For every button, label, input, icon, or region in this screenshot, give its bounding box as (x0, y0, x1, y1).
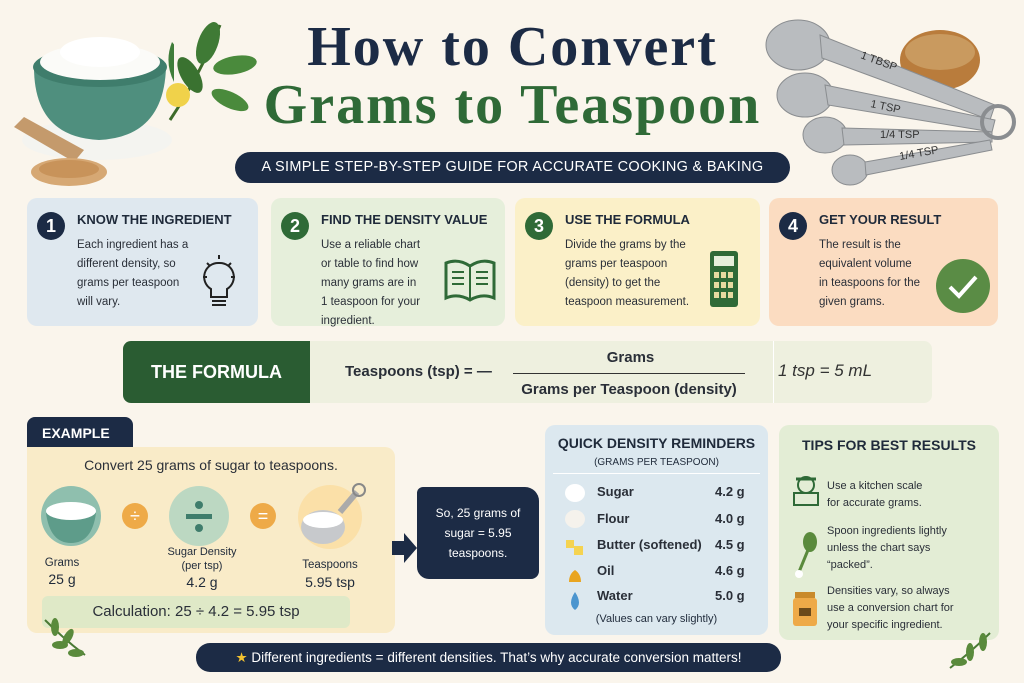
card 3: teaspoon measurement. (565, 296, 689, 308)
card 1: will vary. (77, 296, 120, 308)
title: Grams to Teaspoon (264, 74, 761, 136)
icons: ingredients (565, 484, 585, 610)
example panel: 25 g (48, 571, 76, 587)
card 2: 1 teaspoon for your (321, 296, 420, 308)
example panel: (per tsp) (182, 560, 222, 572)
calculation box (42, 596, 350, 628)
icon: calculator (710, 251, 738, 307)
density panel: Oil (597, 563, 614, 578)
density panel: 4.5 g (715, 537, 745, 552)
tips panel: “packed”. (827, 559, 873, 571)
example panel: Convert 25 grams of sugar to teaspoons. (84, 457, 338, 473)
card 3: USE THE FORMULA (565, 212, 690, 227)
card 4: equivalent volume (819, 258, 912, 270)
density panel (545, 425, 768, 635)
result callout: So, 25 grams of (436, 506, 520, 520)
decorative: flour bowl (14, 37, 174, 186)
tips panel: Spoon ingredients lightly (827, 525, 947, 537)
arrow (392, 533, 417, 563)
result callout: sugar = 5.95 (444, 526, 512, 540)
card 2: ingredient. (321, 315, 375, 327)
card 4: given grams. (819, 296, 885, 308)
formula bar: 1 tsp = 5 mL (778, 361, 872, 380)
card 1 (27, 198, 258, 326)
card 2: Use a reliable chart (321, 239, 420, 251)
card 2: 2 (290, 216, 300, 236)
tips panel: your specific ingredient. (827, 619, 943, 631)
example panel: 5.95 tsp (305, 574, 355, 590)
icon: spoon (795, 532, 817, 578)
formula bar (123, 341, 932, 403)
density panel: 4.2 g (715, 484, 745, 499)
density panel: QUICK DENSITY REMINDERS (558, 435, 755, 451)
bottom banner (196, 643, 781, 672)
density panel: Sugar (597, 484, 634, 499)
title: How to Convert (307, 16, 718, 78)
formula bar: THE FORMULA (151, 362, 282, 382)
density panel: Butter (softened) (597, 537, 702, 552)
card 3: (density) to get the (565, 277, 660, 289)
tips panel: Use a kitchen scale (827, 480, 922, 492)
density panel: Water (597, 588, 633, 603)
density panel: 5.0 g (715, 588, 745, 603)
icon: check (936, 259, 990, 313)
density panel: (Values can vary slightly) (596, 613, 717, 625)
example panel: Grams (45, 557, 79, 569)
tips panel: for accurate grams. (827, 497, 922, 509)
card 4: GET YOUR RESULT (819, 212, 941, 227)
tips panel: Densities vary, so always (827, 585, 950, 597)
icon: scale (793, 476, 819, 506)
card 2: many grams are in (321, 277, 416, 289)
card 4 (769, 198, 998, 326)
decorative leaf sprig right (950, 632, 991, 669)
example panel: = (258, 506, 268, 526)
card 3: grams per teaspoon (565, 258, 667, 270)
density panel: Flour (597, 511, 630, 526)
card 4: The result is the (819, 239, 901, 251)
example panel (27, 447, 395, 633)
card 1: Each ingredient has a (77, 239, 188, 251)
decorative: measuring spoons: 1 TSP (869, 98, 902, 116)
density panel: (GRAMS PER TEASPOON) (594, 457, 719, 468)
card 3: 3 (534, 216, 544, 236)
card 2: or table to find how (321, 258, 418, 270)
formula bar: Grams per Teaspoon (density) (521, 381, 737, 398)
tips panel: use a conversion chart for (827, 602, 954, 614)
tips panel (779, 425, 999, 640)
example panel: Teaspoons (302, 559, 358, 571)
example tab: EXAMPLE (42, 425, 110, 441)
icon: divide: ÷ (130, 506, 140, 526)
calculation box: Calculation: 25 ÷ 4.2 = 5.95 tsp (92, 603, 300, 620)
card 1: grams per teaspoon (77, 277, 179, 289)
card 1: 1 (46, 216, 56, 236)
icon: light bulb (203, 255, 235, 306)
subtitle pill: A SIMPLE STEP-BY-STEP GUIDE FOR ACCURATE COOKING & BAKING (262, 159, 763, 175)
decorative leaf sprig (44, 618, 86, 657)
card 1: KNOW THE INGREDIENT (77, 212, 232, 227)
decorative: leaves (166, 22, 257, 121)
formula bar: Grams (607, 349, 654, 366)
bottom banner: ★ Different ingredients = different densities. That’s why accurate conversion matters! (236, 650, 742, 665)
card 3: Divide the grams by the (565, 239, 686, 251)
density panel: 4.6 g (715, 563, 745, 578)
result callout: teaspoons. (449, 546, 507, 560)
tips panel: TIPS FOR BEST RESULTS (802, 437, 976, 453)
card 3 (515, 198, 760, 326)
result callout (417, 487, 539, 579)
density panel: 4.0 g (715, 511, 745, 526)
title (264, 16, 761, 136)
icon: jar (793, 592, 817, 626)
example panel: Sugar Density (167, 546, 237, 558)
card 4: 4 (788, 216, 798, 236)
card 2 (271, 198, 505, 326)
card 2: FIND THE DENSITY VALUE (321, 212, 487, 227)
icon: book (444, 260, 496, 302)
subtitle pill (235, 152, 790, 183)
icon: bowl (41, 486, 101, 546)
example tab (27, 417, 133, 449)
icon: divide (122, 503, 148, 529)
card 1: different density, so (77, 258, 176, 270)
decorative: measuring spoons: 1/4 TSP (880, 129, 920, 141)
tips panel: unless the chart says (827, 542, 930, 554)
formula bar: Teaspoons (tsp) = — (345, 363, 492, 380)
example panel: 4.2 g (186, 574, 218, 590)
card 4: in teaspoons for the (819, 277, 920, 289)
decorative: measuring spoons: 1/4 TSP (898, 144, 939, 163)
decorative: measuring spoons: 1 TBSP (859, 50, 899, 74)
decorative: measuring spoons (766, 20, 1016, 186)
